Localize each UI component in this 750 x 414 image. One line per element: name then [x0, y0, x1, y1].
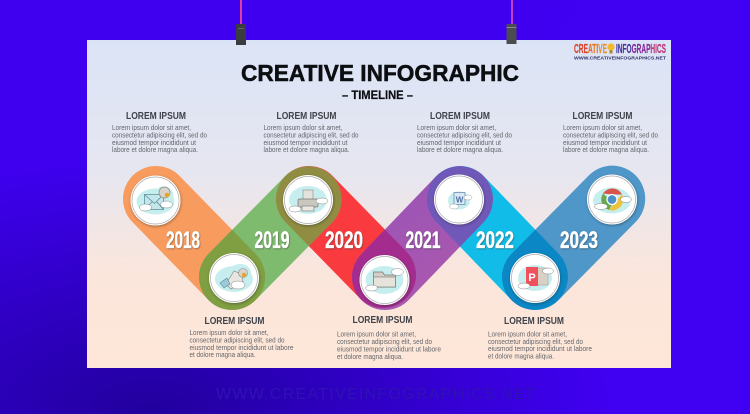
- icon: powerpoint: P: [528, 272, 536, 284]
- timeline ribbon: [123, 166, 646, 310]
- hanging strings and clips: [236, 0, 516, 45]
- text block: top 2020: LOREM IPSUM: [276, 110, 337, 122]
- text block: top 2018: [112, 110, 207, 154]
- text block: top 2020: Lorem ipsum dolor sit amet,: [264, 123, 342, 132]
- year labels: 2022: [476, 227, 514, 254]
- title: CREATIVE INFOGRAPHIC: [241, 60, 519, 86]
- text block: top 2022: Lorem ipsum dolor sit amet,: [417, 123, 496, 132]
- text block: bottom 2019: et dolore magna aliqua.: [190, 350, 256, 359]
- panel: [87, 40, 671, 368]
- text block: top 2018: eiusmod tempor incididunt ut: [112, 138, 197, 147]
- text block: top 2022: [417, 110, 512, 154]
- overlap: 2018 and 2019: [199, 230, 266, 310]
- text block: bottom 2021: Lorem ipsum dolor sit amet,: [337, 330, 416, 339]
- icon: open mail: [209, 253, 259, 303]
- text block: bottom 2023: consectetur adipiscing elit, sed do: [488, 337, 583, 346]
- text block: bottom 2019: consectetur adipiscing elit, sed do: [190, 336, 284, 344]
- text block: top 2018: LOREM IPSUM: [126, 110, 186, 122]
- capsule: 2018: [109, 152, 279, 324]
- icon: mail: [130, 176, 180, 226]
- text block: top 2018: Lorem ipsum dolor sit amet,: [112, 123, 191, 132]
- text block: bottom 2021: LOREM IPSUM: [352, 314, 413, 326]
- text block: bottom 2023: [488, 315, 592, 360]
- text block: bottom 2019: LOREM IPSUM: [204, 315, 265, 327]
- icon: word document: [434, 174, 484, 224]
- text block: bottom 2023: Lorem ipsum dolor sit amet,: [488, 330, 567, 338]
- overlap: 2021 and 2022: [427, 166, 493, 246]
- year labels: [166, 227, 598, 254]
- year labels: 2020: [325, 227, 363, 254]
- subtitle: – TIMELINE –: [342, 88, 413, 102]
- text block: top 2022: eiusmod tempor incididunt ut: [417, 138, 502, 147]
- text block: top 2022: consectetur adipiscing elit, sed do: [417, 130, 512, 140]
- capsule: 2021: [338, 153, 507, 324]
- capsule: 2023: [488, 152, 659, 324]
- capsule: 2019: [185, 153, 355, 324]
- text block: top 2018: labore et dolore magna aliqua.: [112, 145, 198, 154]
- logo: CREATIVE: [574, 41, 607, 56]
- year labels: 2019: [254, 227, 290, 254]
- logo: [574, 41, 666, 60]
- year labels: 2018: [166, 227, 200, 254]
- capsule: 2020: [262, 152, 430, 322]
- text block: top 2023: consectetur adipiscing elit, sed do: [563, 130, 658, 140]
- capsule: 2022: [413, 152, 582, 323]
- text block: bottom 2019: [190, 315, 294, 359]
- icon: folder: [360, 255, 410, 305]
- text block: top 2020: consectetur adipiscing elit, sed do: [264, 130, 358, 140]
- logo: INFOGRAPHICS: [616, 41, 666, 56]
- text block: top 2020: eiusmod tempor incididunt ut: [264, 138, 348, 147]
- text block: bottom 2021: [337, 314, 441, 361]
- text block: top 2022: labore et dolore magna aliqua.: [417, 145, 503, 154]
- text block: top 2020: [264, 110, 358, 154]
- icon: word document: W: [456, 196, 464, 204]
- text block: bottom 2019: Lorem ipsum dolor sit amet,: [190, 328, 268, 337]
- text block: bottom 2021: eiusmod tempor incididunt ut labore: [337, 344, 441, 354]
- logo: WWW.CREATIVEINFOGRAPHICS.NET: [574, 56, 666, 60]
- year labels: 2023: [560, 227, 598, 254]
- icon: chrome: [587, 174, 637, 224]
- overlap: 2019 and 2020: [276, 166, 342, 246]
- overlap: 2020 and 2021: [352, 230, 416, 308]
- text block: top 2018: consectetur adipiscing elit, sed do: [112, 130, 207, 140]
- text block: top 2023: LOREM IPSUM: [572, 110, 633, 122]
- text block: bottom 2023: LOREM IPSUM: [504, 315, 564, 327]
- text block: top 2023: labore et dolore magna aliqua.: [563, 145, 649, 154]
- icon: powerpoint: [510, 253, 560, 303]
- text block: top 2020: labore et dolore magna aliqua.: [264, 145, 350, 154]
- text block: top 2022: LOREM IPSUM: [430, 110, 490, 122]
- text block: top 2023: eiusmod tempor incididunt ut: [563, 138, 648, 147]
- text block: bottom 2019: eiusmod tempor incididunt ut labore: [190, 343, 294, 352]
- text block: bottom 2023: eiusmod tempor incididunt ut labore: [488, 344, 592, 353]
- text block: bottom 2021: et dolore magna aliqua.: [337, 352, 403, 361]
- text block: top 2023: [563, 110, 658, 154]
- overlap: 2022 and 2023: [502, 230, 568, 310]
- watermark: WWW.CREATIVEINFOGRAPHICS.NET: [216, 386, 536, 403]
- text block: bottom 2021: consectetur adipiscing elit, sed do: [337, 337, 432, 346]
- icon: printer: [283, 175, 333, 225]
- text block: top 2023: Lorem ipsum dolor sit amet,: [563, 123, 642, 132]
- text block: bottom 2023: et dolore magna aliqua.: [488, 352, 554, 360]
- year labels: 2021: [406, 227, 440, 254]
